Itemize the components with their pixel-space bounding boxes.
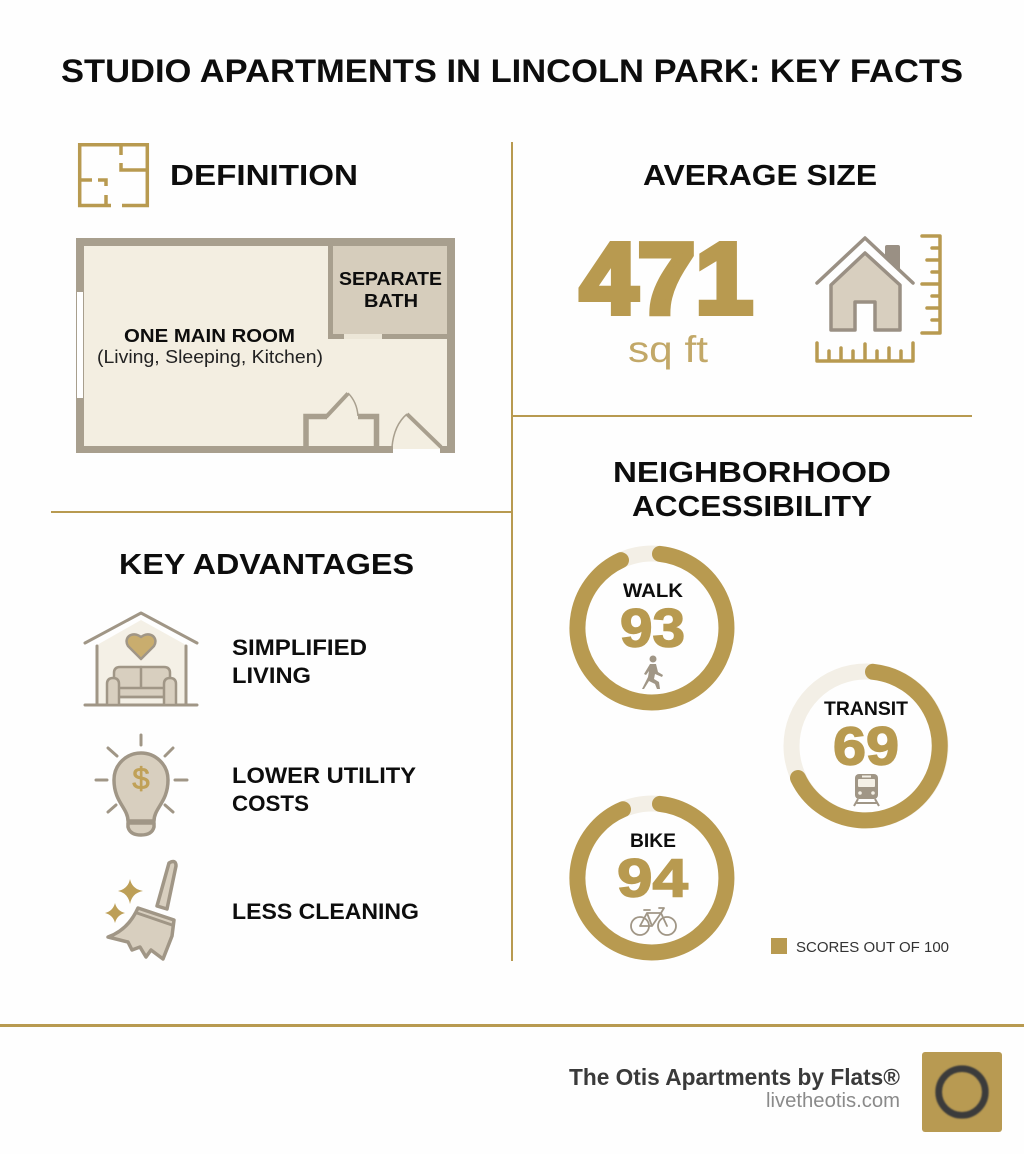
stat: 471: 471: [580, 223, 753, 335]
heading: neighborhood accessibility: NEIGHBORHOOD: [613, 457, 891, 489]
footer: [0, 1024, 1024, 1132]
panel: average size: [580, 160, 940, 370]
text: simplified living: SIMPLIFIED: [232, 635, 367, 660]
text: lower utility costs: COSTS: [232, 791, 309, 816]
bike score gauge: BIKE: [630, 830, 676, 852]
logo: [922, 1052, 1002, 1132]
legend: scores out of 100: SCORES OUT OF 100: [796, 939, 949, 956]
text: simplified living: LIVING: [232, 663, 311, 688]
icon: train: [854, 774, 879, 806]
icon: walker: [642, 656, 663, 689]
label: separate bath: [339, 268, 442, 311]
brand name: The Otis Apartments by Flats®: [569, 1064, 900, 1090]
panel: neighborhood accessibility: [577, 457, 949, 956]
panel: definition: [76, 145, 455, 453]
website: livetheotis.com: [766, 1090, 900, 1112]
label: one main room: ONE MAIN ROOM: [124, 325, 295, 346]
bike score gauge: 94: [617, 848, 688, 908]
label: one main room: [97, 325, 323, 367]
text: lower utility costs: [232, 763, 416, 816]
text: lower utility costs: LOWER UTILITY: [232, 763, 416, 788]
transit score gauge: 69: [833, 716, 899, 776]
icon: house with rulers: [817, 236, 940, 361]
walk score gauge: WALK: [623, 580, 683, 602]
icon: floor plan: [80, 145, 147, 206]
text: less cleaning: LESS CLEANING: [232, 899, 419, 924]
walk score gauge: [577, 554, 726, 702]
floor plan diagram: [76, 238, 455, 453]
icon: broom with sparkles: [105, 862, 176, 959]
label: one main room: (Living, Sleeping, Kitchen): [97, 347, 323, 367]
icon: home with heart and sofa: [85, 613, 197, 705]
heading: definition: DEFINITION: [170, 160, 358, 192]
panel: key advantages: [85, 549, 419, 959]
bike score gauge: [577, 804, 726, 952]
label: separate bath: BATH: [364, 290, 418, 311]
transit score gauge: TRANSIT: [824, 698, 908, 720]
heading: key advantages: KEY ADVANTAGES: [119, 549, 414, 581]
heading: neighborhood accessibility: [613, 457, 891, 523]
heading: neighborhood accessibility: ACCESSIBILITY: [632, 491, 872, 523]
text: simplified living: [232, 635, 367, 688]
icon: light bulb with dollar: $: [132, 761, 150, 796]
title: STUDIO APARTMENTS IN LINCOLN PARK: KEY FACTS: [61, 53, 963, 89]
icon: light bulb with dollar: [96, 735, 187, 835]
icon: bicycle: [631, 908, 676, 935]
heading: average size: AVERAGE SIZE: [643, 160, 877, 192]
unit: sq ft: sq ft: [628, 329, 709, 370]
label: separate bath: SEPARATE: [339, 268, 442, 289]
transit score gauge: [792, 672, 940, 820]
walk score gauge: 93: [620, 598, 685, 658]
